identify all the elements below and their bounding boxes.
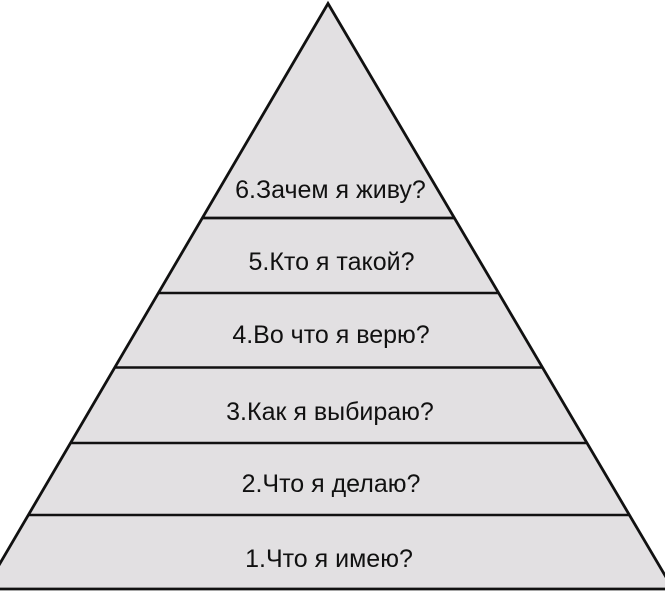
level 3 label: 3.Как я выбираю? (226, 398, 434, 426)
level 5 label: 5.Кто я такой? (249, 248, 414, 276)
level 2 label: 2.Что я делаю? (242, 470, 420, 498)
level 4 label: 4.Во что я верю? (232, 321, 430, 349)
level 6 label: 6.Зачем я живу? (235, 176, 426, 204)
level 1 label: 1.Что я имею? (245, 545, 413, 573)
